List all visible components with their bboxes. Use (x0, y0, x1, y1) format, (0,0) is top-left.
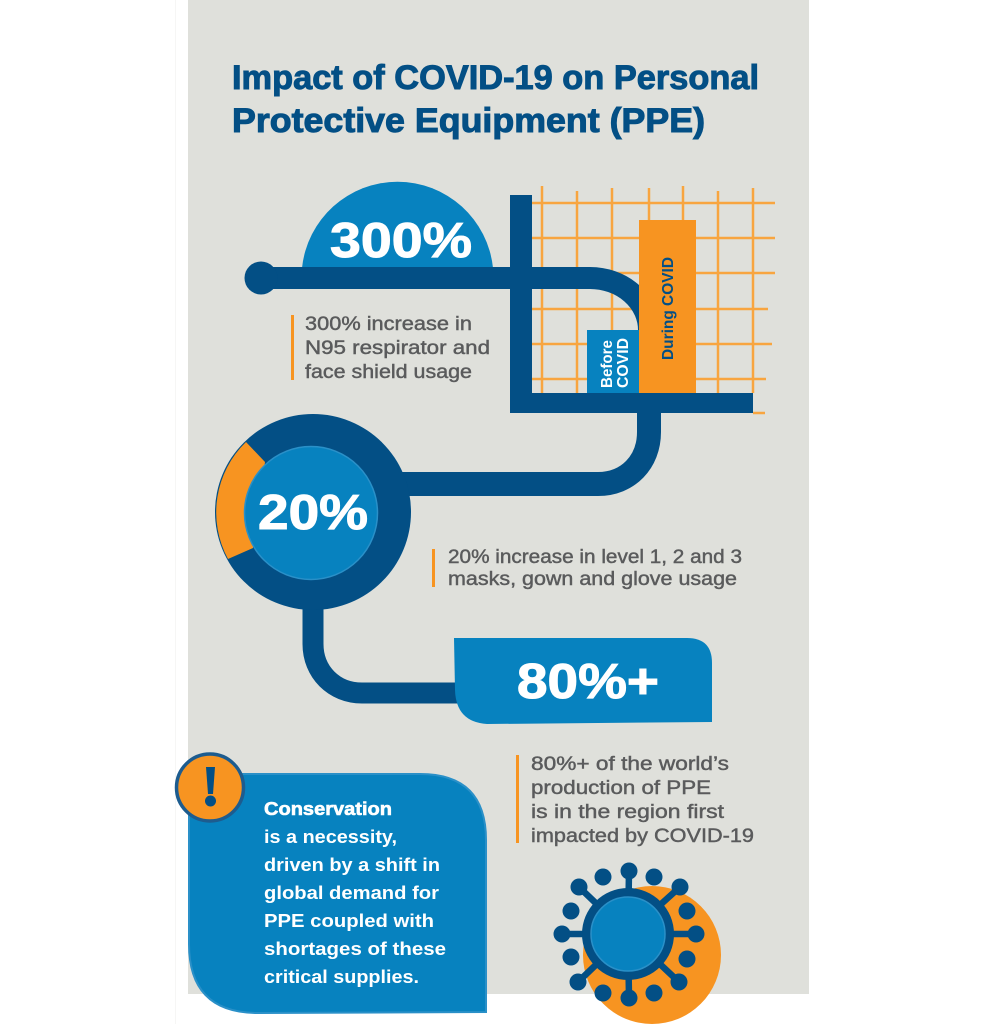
accent bar: 80% note (516, 755, 519, 843)
text: 80% note (531, 753, 754, 847)
text: 20% note (448, 546, 742, 590)
bar: before COVID: COVID (615, 338, 632, 388)
callout text: critical supplies. (264, 966, 419, 987)
stat box: 80%+ (454, 638, 712, 724)
stat box: 80%+: 80%+ (517, 655, 659, 709)
chart: before and during COVID bars (261, 186, 775, 413)
donut chart: 20%: 20% (258, 486, 368, 540)
accent bar: 20% note (432, 549, 435, 587)
title (232, 59, 759, 140)
connector pipe: chart to donut (400, 413, 649, 484)
callout text: is a necessity, (264, 826, 397, 847)
text: 300% note: 300% increase in (305, 313, 472, 335)
stat badge: 300%: 300% (330, 214, 472, 268)
pipe start dot (244, 262, 278, 294)
connector pipe: donut to 80% box (313, 600, 470, 693)
callout text (264, 798, 446, 987)
text: 80% note: impacted by COVID-19 (531, 825, 754, 847)
icon: exclamation mark (176, 754, 244, 821)
title: Protective Equipment (PPE) (232, 102, 705, 140)
callout: conservation (189, 774, 486, 1013)
bar: before COVID (587, 330, 639, 394)
background panel (188, 0, 809, 994)
text: 300% note (305, 313, 490, 383)
bar: during COVID: During COVID (660, 257, 677, 360)
callout text: driven by a shift in (264, 854, 440, 875)
stat badge: 300% (302, 182, 493, 268)
callout text: PPE coupled with (264, 910, 434, 931)
donut chart: 20% (215, 414, 411, 610)
accent bar: 300% note (291, 315, 294, 380)
callout text: global demand for (264, 882, 439, 903)
text: 20% note: 20% increase in level 1, 2 and 3 (448, 546, 742, 568)
title: Impact of COVID-19 on Personal (232, 59, 759, 97)
callout text: Conservation (264, 798, 392, 819)
text: 80% note: 80%+ of the world’s (531, 753, 729, 775)
text: 300% note: N95 respirator and (305, 337, 490, 359)
icon: virus (554, 862, 721, 1024)
bar: during COVID (639, 220, 696, 394)
connector pipe from 300% through chart (261, 278, 649, 345)
text: 300% note: face shield usage (305, 361, 472, 383)
text: 80% note: is in the region first (531, 801, 725, 823)
chart grid (531, 186, 775, 413)
text: 20% note: masks, gown and glove usage (448, 568, 737, 590)
text: 80% note: production of PPE (531, 777, 711, 799)
bar: before COVID: Before (599, 340, 616, 388)
callout text: shortages of these (264, 938, 446, 959)
chart axes (510, 195, 753, 413)
